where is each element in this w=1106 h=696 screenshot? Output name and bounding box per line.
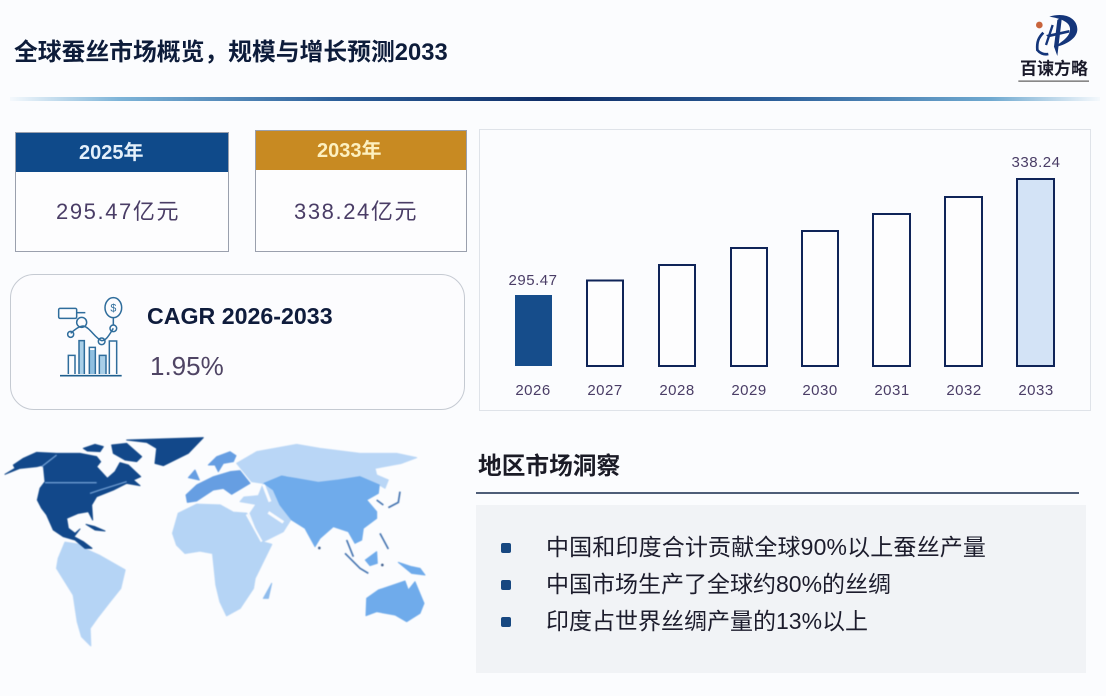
bar 2026 (515, 295, 552, 366)
bullet 3 (501, 617, 511, 627)
bar chart: 295.47 (509, 272, 557, 289)
bar chart: 2026 (515, 382, 551, 399)
bar chart: 338.24 (1012, 154, 1060, 171)
panel: CAGR (10, 274, 465, 410)
bar chart: 2031 (874, 382, 910, 399)
card header: 2025: 2025年 (79, 142, 144, 164)
region: Europe (186, 452, 250, 502)
region: Asia and Oceania (263, 476, 425, 622)
bar chart (479, 129, 1091, 411)
icon: growth chart with dollar (58, 296, 122, 376)
region: Africa and South America (57, 504, 272, 646)
heading underline (476, 492, 1079, 494)
title: 全球蚕丝市场概览，规模与增长预测2033 (14, 39, 448, 66)
bar chart: 2032 (946, 382, 982, 399)
card value: 2033: 338.24亿元 (294, 199, 418, 224)
world map (4, 436, 426, 647)
text 1: 中国和印度合计贡献全球90%以上蚕丝产量 (546, 534, 986, 560)
card header: 2025 (16, 133, 228, 172)
bullet 2 (501, 580, 511, 590)
icon: growth chart with dollar: $ (110, 303, 116, 315)
bar chart: 2028 (659, 382, 695, 399)
panel: regional insights list (476, 505, 1086, 673)
text 2: 中国市场生产了全球约80%的丝绸 (546, 571, 891, 597)
card header: 2033: 2033年 (317, 140, 382, 162)
text 3: 印度占世界丝绸产量的13%以上 (546, 608, 868, 634)
CAGR label: CAGR 2026-2033 (147, 303, 333, 329)
card: 2025 (15, 132, 229, 252)
CAGR value: 1.95% (150, 351, 224, 381)
bar chart: 2030 (802, 382, 838, 399)
region: Russia and Middle East (237, 444, 417, 542)
card header: 2033 (256, 131, 466, 170)
heading: regional insight: 地区市场洞察 (478, 454, 620, 480)
bar chart: 2029 (731, 382, 767, 399)
bullet 1 (501, 543, 511, 553)
card value: 2025: 295.47亿元 (56, 199, 180, 224)
logo: 百谏方略 (1020, 59, 1088, 79)
bar chart: 2027 (587, 382, 623, 399)
card: 2033 (255, 130, 467, 252)
bar chart: 2033 (1018, 382, 1054, 399)
logo (1018, 15, 1089, 82)
header divider line (10, 97, 1100, 101)
region: North America (5, 438, 203, 548)
